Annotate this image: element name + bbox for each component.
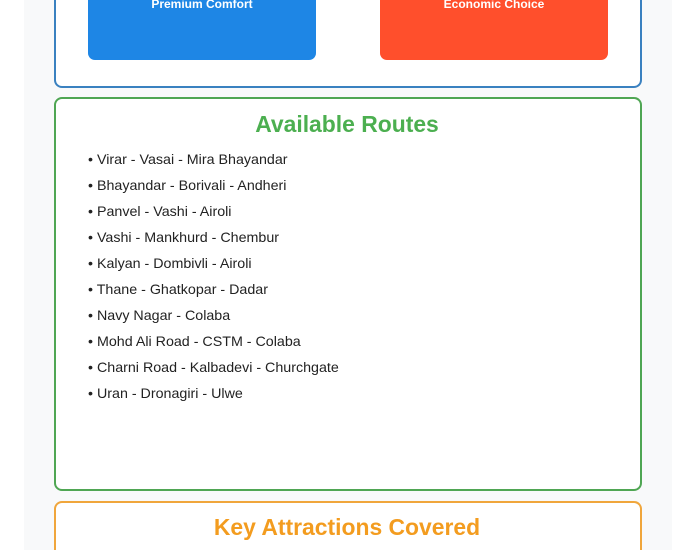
route list: • Uran - Dronagiri - Ulwe	[88, 386, 243, 402]
route list: • Kalyan - Dombivli - Airoli	[88, 256, 252, 272]
route list: • Navy Nagar - Colaba	[88, 308, 230, 324]
panel: bus classes	[54, 0, 642, 88]
route list: • Vashi - Mankhurd - Chembur	[88, 230, 279, 246]
heading: key attractions: Key Attractions Covered	[214, 514, 480, 540]
route list: • Bhayandar - Borivali - Andheri	[88, 178, 286, 194]
route list: • Mohd Ali Road - CSTM - Colaba	[88, 334, 301, 350]
card: premium comfort	[88, 0, 316, 60]
card: economic choice	[380, 0, 608, 60]
panel: available routes	[54, 97, 642, 491]
route list: • Panvel - Vashi - Airoli	[88, 204, 231, 220]
route list: • Virar - Vasai - Mira Bhayandar	[88, 152, 288, 168]
route list	[88, 152, 339, 402]
route list: • Thane - Ghatkopar - Dadar	[88, 282, 268, 298]
route list: • Charni Road - Kalbadevi - Churchgate	[88, 360, 339, 376]
panel: key attractions	[54, 501, 642, 550]
heading: available routes: Available Routes	[255, 111, 439, 137]
